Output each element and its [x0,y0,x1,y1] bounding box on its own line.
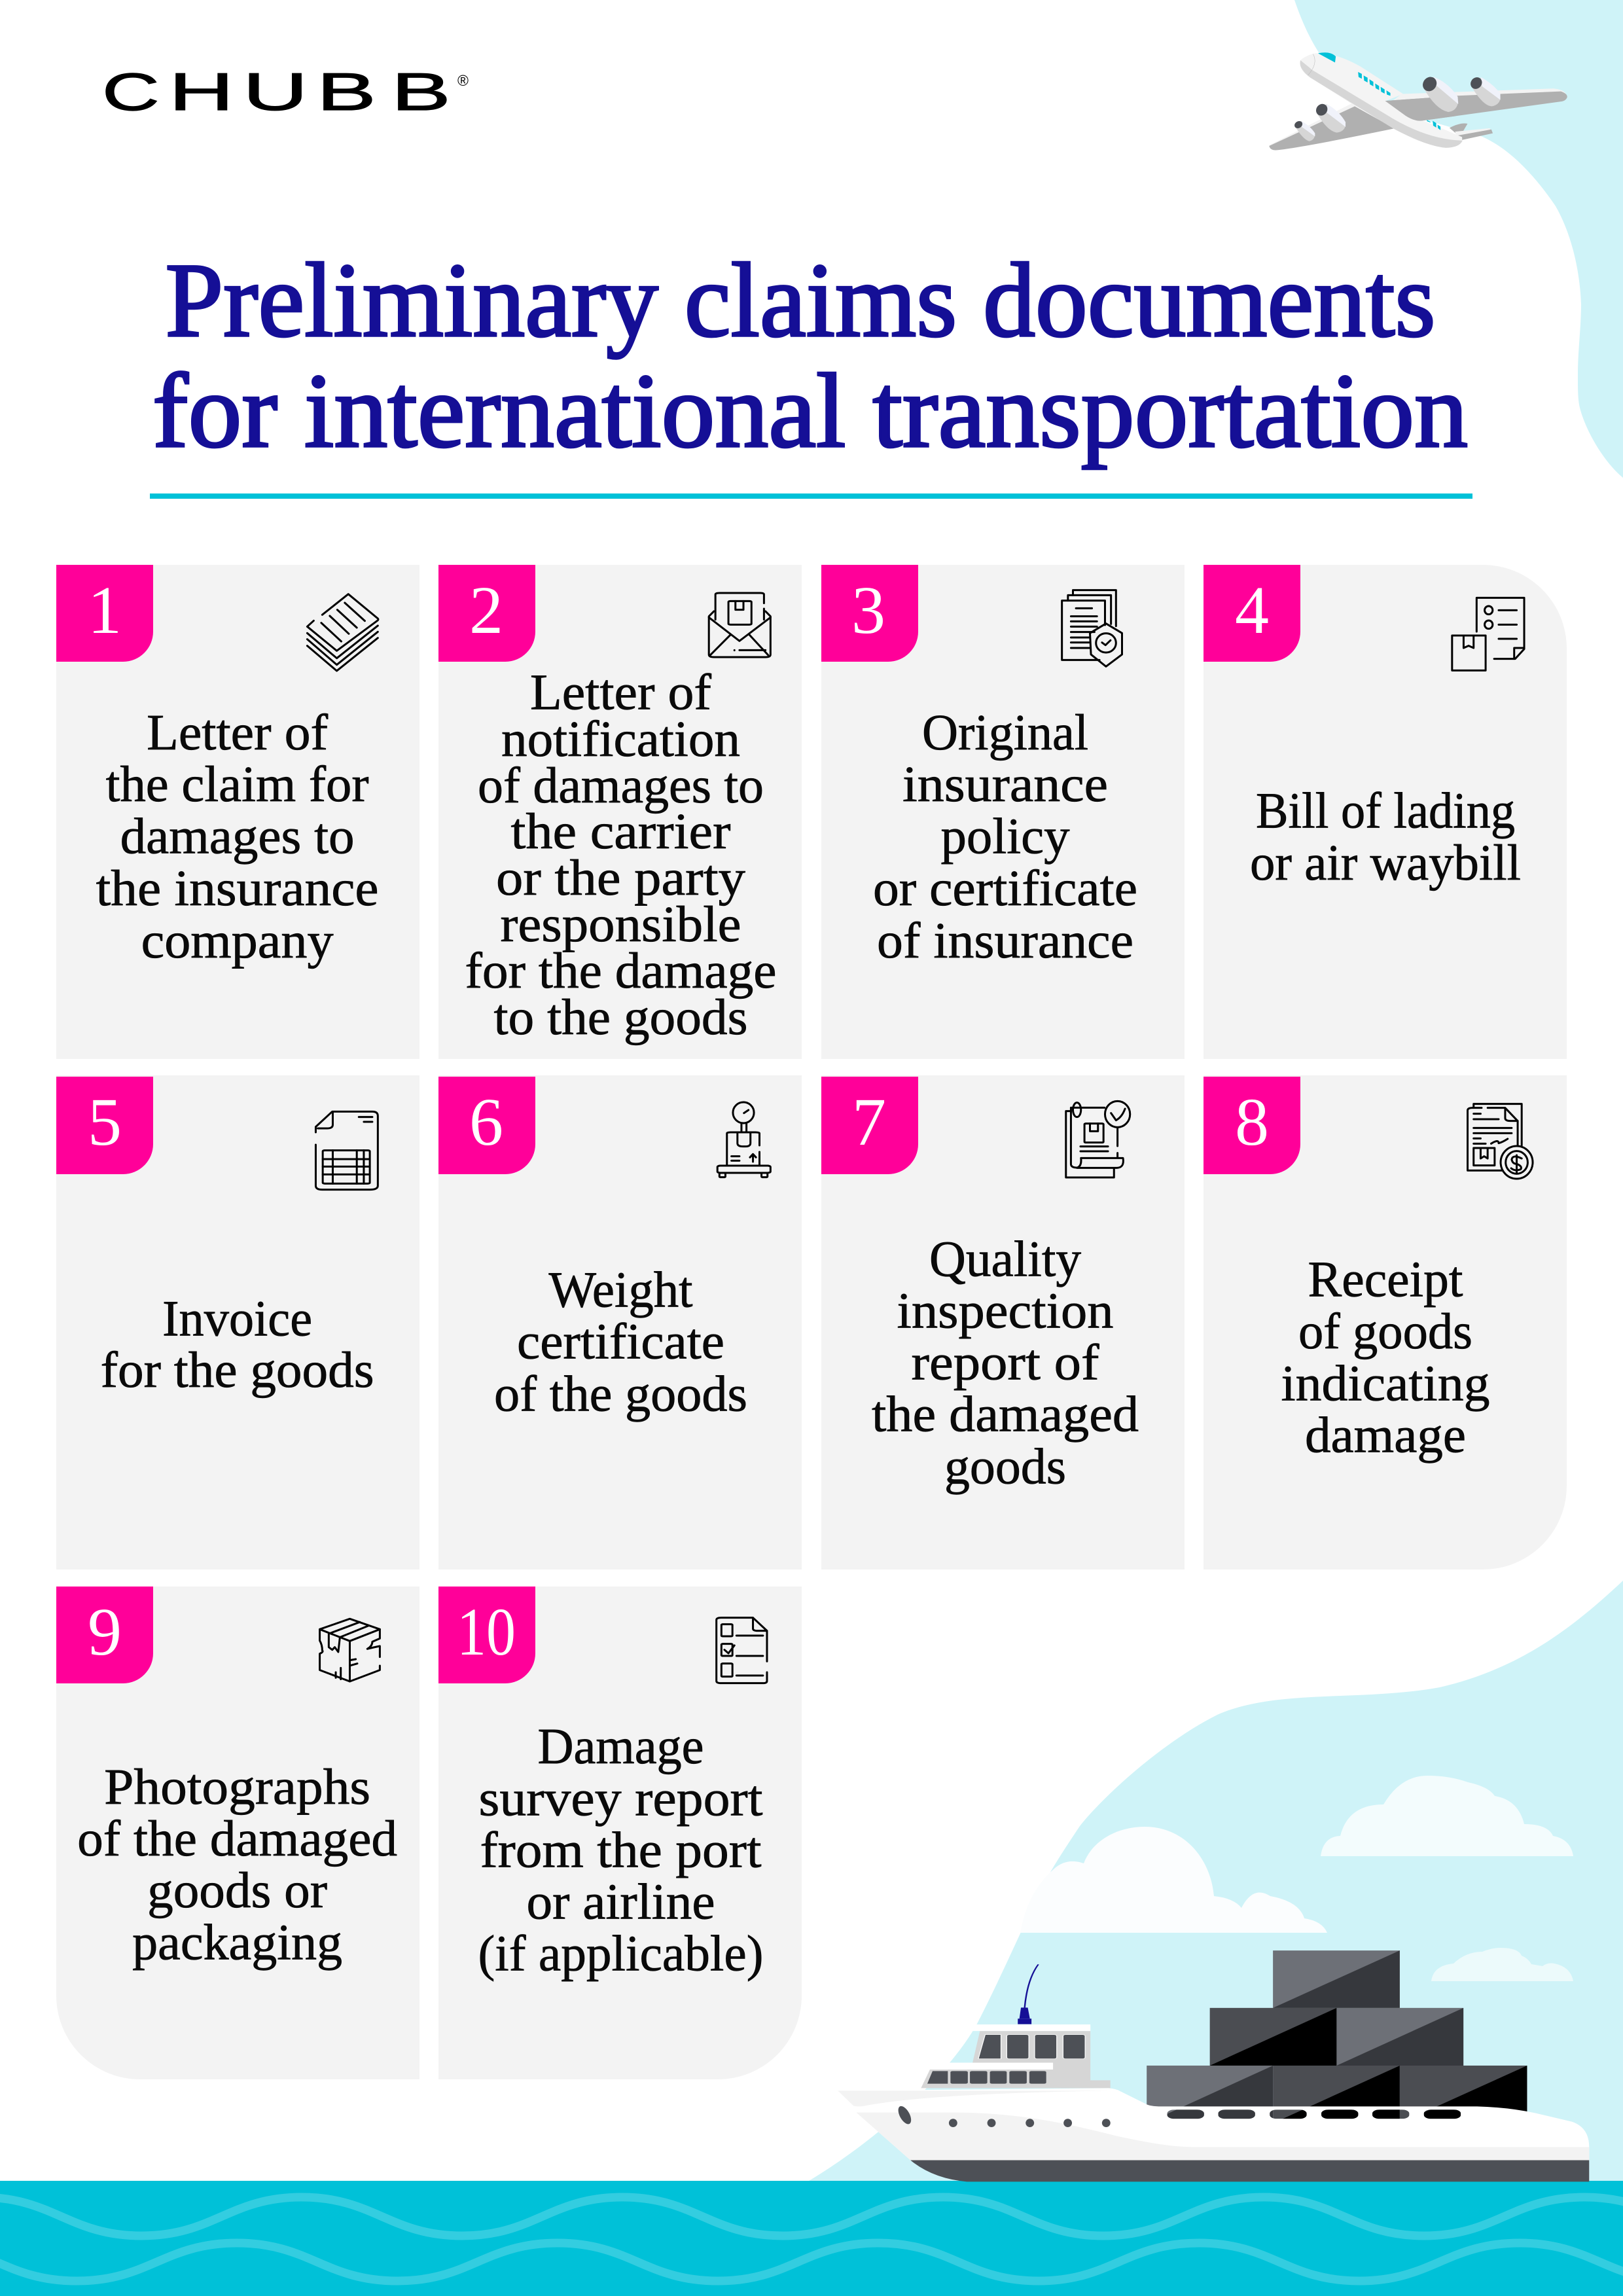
icon: documents with shield [1062,590,1122,666]
title [152,242,1468,470]
icon: weighing scale [717,1102,770,1177]
number badge 10: 10 [457,1594,516,1670]
text: goods or [147,1861,327,1918]
hull openings [1168,2109,1461,2119]
panel: document 10 [438,1587,802,2079]
number badge 2: 2 [469,573,503,648]
wave: lower [0,2243,1623,2281]
engine: far outer [1470,76,1501,106]
text: Receipt [1308,1251,1463,1308]
logo: Chubb: H [169,62,234,121]
title underline [150,493,1472,499]
number badge 10 [438,1587,535,1683]
wing root cover [1385,96,1455,121]
text: or certificate [873,859,1137,916]
text: for the goods [101,1341,374,1398]
text: the damaged [872,1386,1139,1443]
engine: near outer [1294,120,1315,141]
number badge 3 [821,565,918,662]
hull shading [838,2090,1589,2161]
icon: damaged box [320,1619,380,1681]
panel: document 2 [438,565,802,1059]
fuselage [1300,53,1462,147]
text [873,704,1137,969]
text: Letter of [147,704,328,761]
icon: envelope with document [709,593,770,657]
number badge 9 [56,1587,153,1683]
text [101,1290,374,1398]
number badge 5: 5 [88,1085,122,1160]
text: report of [911,1333,1099,1390]
text: indicating [1281,1354,1489,1411]
wave: upper [0,2197,1623,2236]
card background [438,1587,802,2079]
cloud: upper right [1321,1776,1573,1856]
engine: far inner [1421,75,1458,112]
background blob: top right sky [1294,0,1623,478]
text [478,1717,763,1982]
text: Weight [548,1261,693,1318]
icon: invoice [315,1111,378,1190]
cloud: small right [1431,1948,1573,1981]
title: for international transportation [152,353,1468,470]
text: or air waybill [1250,834,1521,891]
text: of insurance [877,912,1133,969]
sea [0,2181,1623,2296]
number badge 3: 3 [851,573,885,648]
text: the claim for [106,755,369,812]
number badge 8 [1204,1077,1300,1174]
text: of goods [1298,1302,1472,1359]
icon: waybill with parcel [1452,598,1524,670]
card background [56,1587,419,2079]
number badge 5 [56,1077,153,1174]
text: Quality [929,1230,1081,1287]
hull lower band [910,2161,1589,2181]
number badge 8: 8 [1235,1085,1269,1160]
text [465,664,776,1045]
background blob: bottom right sky [809,1581,1623,2186]
text: from the port [480,1821,762,1878]
text: Photographs [104,1758,370,1815]
logo: Chubb: U [243,62,308,121]
text: or the party [496,849,745,906]
text: Invoice [162,1290,312,1347]
number badge 9: 9 [88,1594,122,1670]
text: Letter of [530,664,711,720]
text: goods [944,1438,1066,1495]
icon: receipt with coin [1468,1104,1533,1179]
text [77,1758,397,1970]
number badge 1 [56,565,153,662]
number badge 4 [1204,565,1300,662]
panel: document 8 [1204,1075,1567,1570]
logo: Chubb: B [317,62,376,121]
icon: survey checklist [717,1618,767,1683]
text: (if applicable) [478,1925,763,1982]
text: insurance [902,755,1108,812]
text: company [141,912,334,969]
cockpit [1318,52,1336,62]
card background [1204,565,1567,1059]
near wing [1269,102,1355,149]
text: survey report [479,1769,763,1826]
text [872,1230,1139,1495]
title: Preliminary claims documents [165,242,1436,359]
hull [838,2088,1589,2161]
far wing [1391,88,1566,102]
text: to the goods [493,988,747,1045]
panel: document 7 [821,1075,1185,1570]
containers [1147,1950,1527,2123]
number badge 6 [438,1077,535,1174]
card background [821,565,1185,1059]
icon: paper stack [307,594,378,671]
panel: document 9 [56,1587,419,2079]
icon: inspection report [1066,1101,1130,1177]
logo: Chubb [102,62,469,121]
text: damage [1305,1406,1466,1463]
text: for the damage [465,942,776,999]
text [494,1261,747,1422]
card background [56,565,419,1059]
panel: document 6 [438,1075,802,1570]
text: notification [501,710,740,767]
number badge 1: 1 [88,573,122,648]
anchor and portholes [896,2106,1111,2127]
engine: near inner [1315,102,1346,133]
text: damages to [120,808,355,864]
panel: document 3 [821,565,1185,1059]
text: of the damaged [77,1810,397,1867]
number badge 7: 7 [852,1085,886,1160]
cloud: large [1020,1827,1327,1933]
logo: Chubb: B [391,62,451,121]
antenna [1018,1964,1039,2024]
text: Bill of lading [1256,781,1515,839]
card background [56,1075,419,1570]
text: Damage [538,1717,704,1774]
text [96,704,379,969]
panel: document 5 [56,1075,419,1570]
card background [821,1075,1185,1570]
logo: Chubb: ® [457,72,469,89]
text: packaging [132,1913,342,1970]
number badge 2 [438,565,535,662]
card background [438,1075,802,1570]
text: policy [941,808,1069,864]
text: the insurance [96,859,379,916]
text [1250,781,1521,891]
bridge [921,2024,1111,2088]
passenger windows [1358,72,1440,130]
text: responsible [500,895,741,952]
text: of damages to [478,757,764,814]
text: Original [922,704,1088,761]
illustration: airplane [1269,52,1567,150]
card background [1204,1075,1567,1570]
panel: document 4 [1204,565,1567,1059]
illustration: cargo ship [838,1950,1589,2181]
text: or airline [526,1873,715,1929]
panel: document 1 [56,565,419,1059]
tail [1450,124,1467,134]
text: of the goods [494,1365,747,1422]
number badge 4: 4 [1235,573,1269,648]
number badge 6: 6 [469,1085,503,1160]
text: inspection [897,1282,1114,1338]
logo: Chubb: C [102,62,160,121]
number badge 7 [821,1077,918,1174]
card background [438,565,802,1059]
text: certificate [517,1313,724,1370]
text [1281,1251,1489,1463]
text: the carrier [510,802,731,859]
